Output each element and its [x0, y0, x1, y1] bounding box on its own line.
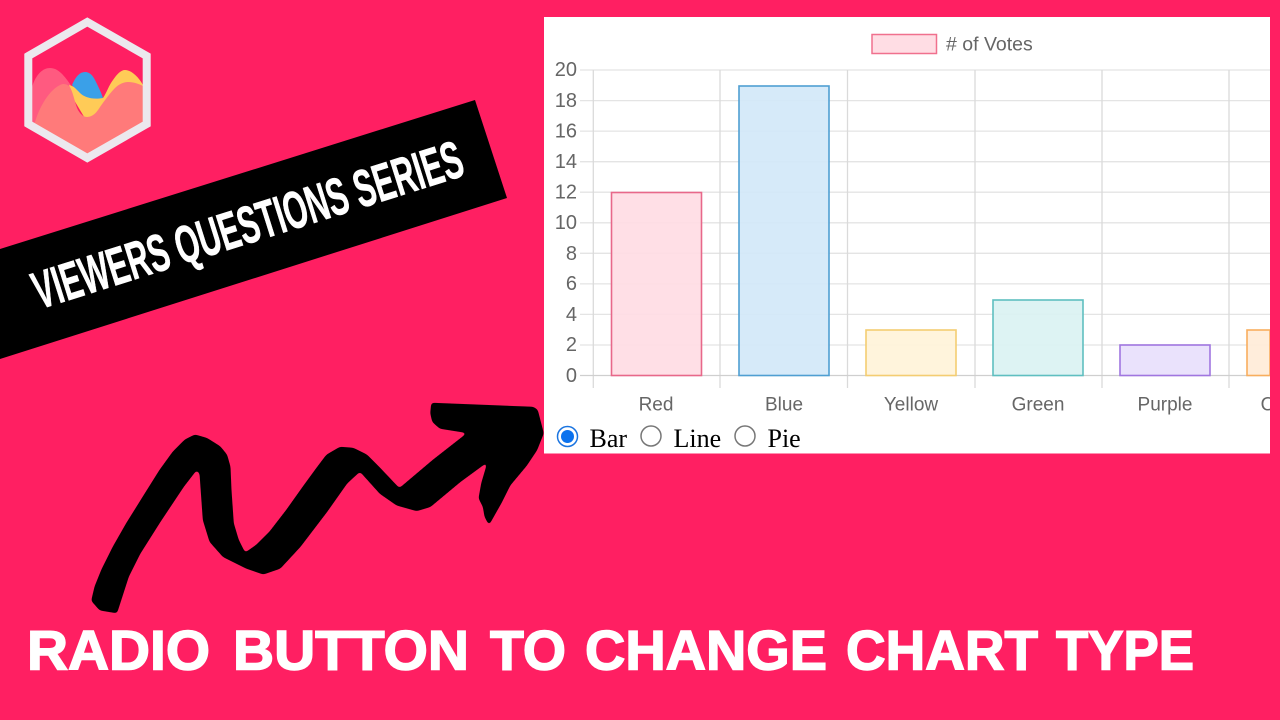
y axis labels: 0 — [566, 365, 577, 387]
title: CHART — [846, 618, 1038, 682]
y axis labels: 16 — [555, 120, 577, 142]
title: CHANGE — [585, 618, 827, 682]
title — [27, 618, 1194, 682]
panel: bar chart screenshot — [544, 17, 1280, 454]
y axis labels: 8 — [566, 243, 577, 265]
x axis labels: Blue — [765, 394, 803, 416]
bars — [612, 86, 1270, 376]
x axis labels: Purple — [1138, 394, 1192, 416]
y axis labels: 12 — [555, 182, 577, 204]
chart legend — [872, 34, 1033, 56]
y axis labels: 4 — [566, 304, 577, 326]
icon: Chart.js hexagon logo — [28, 22, 147, 158]
arrow: hand-drawn zigzag pointing to chart — [92, 403, 543, 613]
y axis labels: 10 — [555, 212, 577, 234]
radio option: Pie — [735, 424, 801, 453]
x axis labels: Green — [1012, 394, 1064, 416]
title: TYPE — [1056, 618, 1194, 682]
y axis labels: 14 — [555, 151, 577, 173]
title: TO — [490, 618, 566, 682]
x axis labels — [639, 394, 1275, 416]
y axis labels: 18 — [555, 90, 577, 112]
y axis labels: 6 — [566, 273, 577, 295]
y axis labels: 20 — [555, 59, 577, 81]
chart grid — [580, 70, 1270, 388]
x axis labels: O — [1261, 394, 1275, 416]
x axis labels: Yellow — [884, 394, 938, 416]
radio option: Bar: Bar — [590, 424, 627, 453]
radio option: Line — [641, 424, 721, 453]
radio option: Line: Line — [674, 424, 721, 453]
title: BUTTON — [233, 618, 469, 682]
y axis labels — [555, 59, 577, 387]
title: RADIO — [27, 618, 210, 682]
x axis labels: Red — [639, 394, 673, 416]
radio option: Bar — [558, 424, 627, 453]
y axis labels: 2 — [566, 334, 577, 356]
banner: viewers questions series — [0, 100, 507, 359]
radio option: Pie: Pie — [768, 424, 801, 453]
chart legend: # of Votes — [946, 34, 1033, 56]
banner text: VIEWERS QUESTIONS SERIES — [25, 130, 470, 321]
